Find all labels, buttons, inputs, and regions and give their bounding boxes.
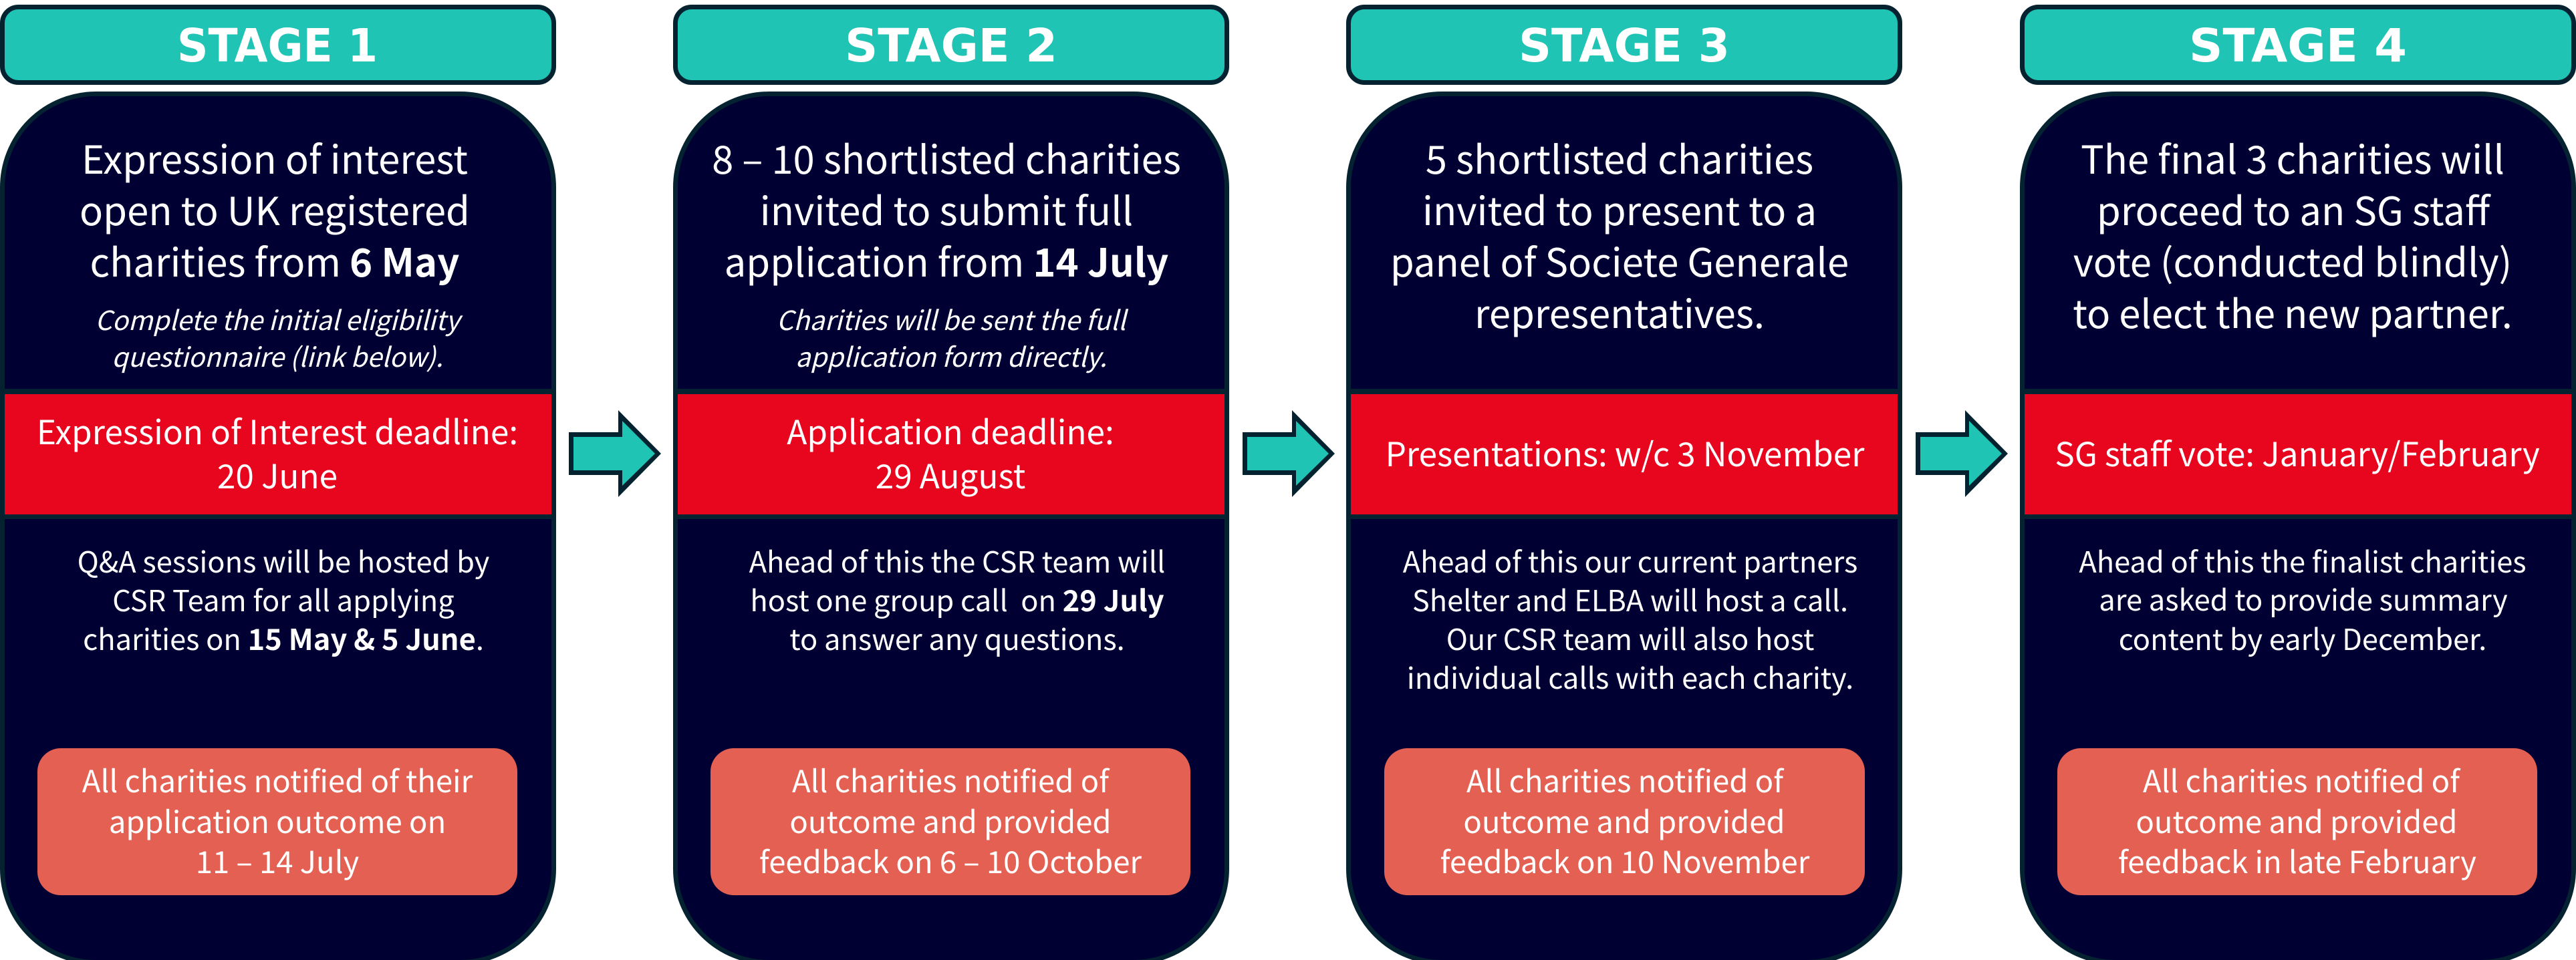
stage 3 header [1349,7,1900,83]
stage 4 details text: content by early December. [2119,617,2486,659]
stage 2 outcome box [711,748,1190,895]
stage 1 intro text: open to UK registered [80,180,470,236]
stage 1 deadline band [0,389,556,519]
stage 1 details text: Q&A sessions will be hosted by [78,540,490,581]
stage 2 details text: host one group call on 29 July [750,579,1164,620]
stage 2 body card [675,94,1227,960]
stage 4 header [2023,7,2573,83]
stage 3 details text: individual calls with each charity. [1407,656,1853,697]
arrow: stage 1 to 2 [569,410,661,497]
stage 4 outcome box: All charities notified of [2143,758,2461,802]
stage 4 deadline band [2020,389,2576,519]
stage 1 header: STAGE 1 [177,19,378,73]
stage 1 deadline band: 20 June [217,451,338,498]
stage 1 header [3,7,553,83]
stage 2 details text [749,540,1165,659]
stage 4 outcome box [2057,748,2537,895]
stage 1 italic note [95,300,463,375]
stage 2 outcome box: feedback on 6 – 10 October [759,838,1142,883]
stage 1 body card [3,94,553,960]
stage 4 details text [2079,540,2527,659]
stage 3 details text: Shelter and ELBA will host a call. [1412,579,1848,620]
stage 3 intro text: invited to present to a [1422,180,1817,236]
stage 1 details text: CSR Team for all applying [112,579,455,620]
stage 1 details text: charities on 15 May & 5 June. [83,617,484,659]
stage 1 italic note: questionnaire (link below). [112,337,443,375]
stage 2 intro text: invited to submit full [760,180,1133,236]
stage 2 intro text [712,129,1181,288]
panel: stage 2 [673,7,1229,960]
arrow: stage 2 to 3 [1243,410,1335,497]
arrow: stage 3 to 4 [1916,410,2008,497]
stage 1 deadline band: Expression of Interest deadline: [37,407,518,454]
stage 3 deadline band [1346,389,1902,519]
stage 2 header [675,7,1227,83]
stage 1 details text [78,540,490,659]
stage 4 outcome box: outcome and provided [2136,798,2458,842]
stage 2 deadline band: 29 August [876,451,1025,498]
stage 2 italic note [777,300,1129,375]
stage 1 intro text: Expression of interest [82,129,468,185]
stage 4 deadline band: SG staff vote: January/February [2055,429,2540,476]
stage 4 details text: Ahead of this the finalist charities [2079,540,2527,581]
stage 3 intro text [1390,129,1849,339]
stage 2 intro text: 8 – 10 shortlisted charities [712,129,1181,185]
stage 3 intro text: panel of Societe Generale [1390,232,1849,288]
panel: stage 4 [2020,7,2576,960]
stage 1 outcome box [37,748,517,895]
stage 4 intro text: vote (conducted blindly) [2073,232,2512,288]
stage 4 body card [2023,94,2573,960]
stage 4 details text: are asked to provide summary [2099,578,2508,619]
stage 2 header: STAGE 2 [845,19,1057,73]
stage 2 outcome box: All charities notified of [792,758,1110,802]
stage 3 outcome box: outcome and provided [1463,798,1785,842]
stage 2 italic note: Charities will be sent the full [777,300,1129,338]
stage 2 outcome box: outcome and provided [789,798,1112,842]
stage 3 outcome box [1384,748,1865,895]
stage 1 intro text: charities from 6 May [90,232,459,288]
stage 3 details text: Ahead of this our current partners [1403,540,1857,581]
stage 4 intro text: proceed to an SG staff [2097,180,2492,236]
stage 4 header: STAGE 4 [2189,19,2407,73]
stage 4 intro text [2073,129,2513,339]
panel: stage 1 [0,7,556,960]
panel: stage 3 [1346,7,1902,960]
stage 3 header: STAGE 3 [1519,19,1730,73]
stage 3 outcome box: feedback on 10 November [1440,838,1810,883]
stage 4 intro text: The final 3 charities will [2081,129,2504,185]
stage 4 outcome box: feedback in late February [2118,838,2476,883]
stage 1 outcome box: All charities notified of their [82,758,473,802]
stage 1 italic note: Complete the initial eligibility [95,300,463,338]
stage 3 details text: Our CSR team will also host [1446,617,1814,659]
stage 2 deadline band: Application deadline: [787,407,1114,454]
stage 1 outcome box: application outcome on [109,798,446,842]
stage 2 italic note: application form directly. [795,337,1107,375]
stage 3 outcome box: All charities notified of [1466,758,1785,802]
stage 2 deadline band [673,389,1229,519]
stage 2 intro text: application from 14 July [725,232,1168,288]
stage 3 details text [1403,540,1857,697]
stage 3 intro text: representatives. [1474,283,1765,339]
stage 1 intro text [80,129,470,288]
stage 1 outcome box: 11 – 14 July [196,838,360,883]
stage 2 details text: to answer any questions. [789,617,1125,659]
stage 2 details text: Ahead of this the CSR team will [749,540,1165,581]
stage 3 body card [1349,94,1900,960]
stage 4 intro text: to elect the new partner. [2073,283,2513,339]
stage 3 deadline band: Presentations: w/c 3 November [1386,429,1865,476]
stage 3 intro text: 5 shortlisted charities [1426,129,1813,185]
